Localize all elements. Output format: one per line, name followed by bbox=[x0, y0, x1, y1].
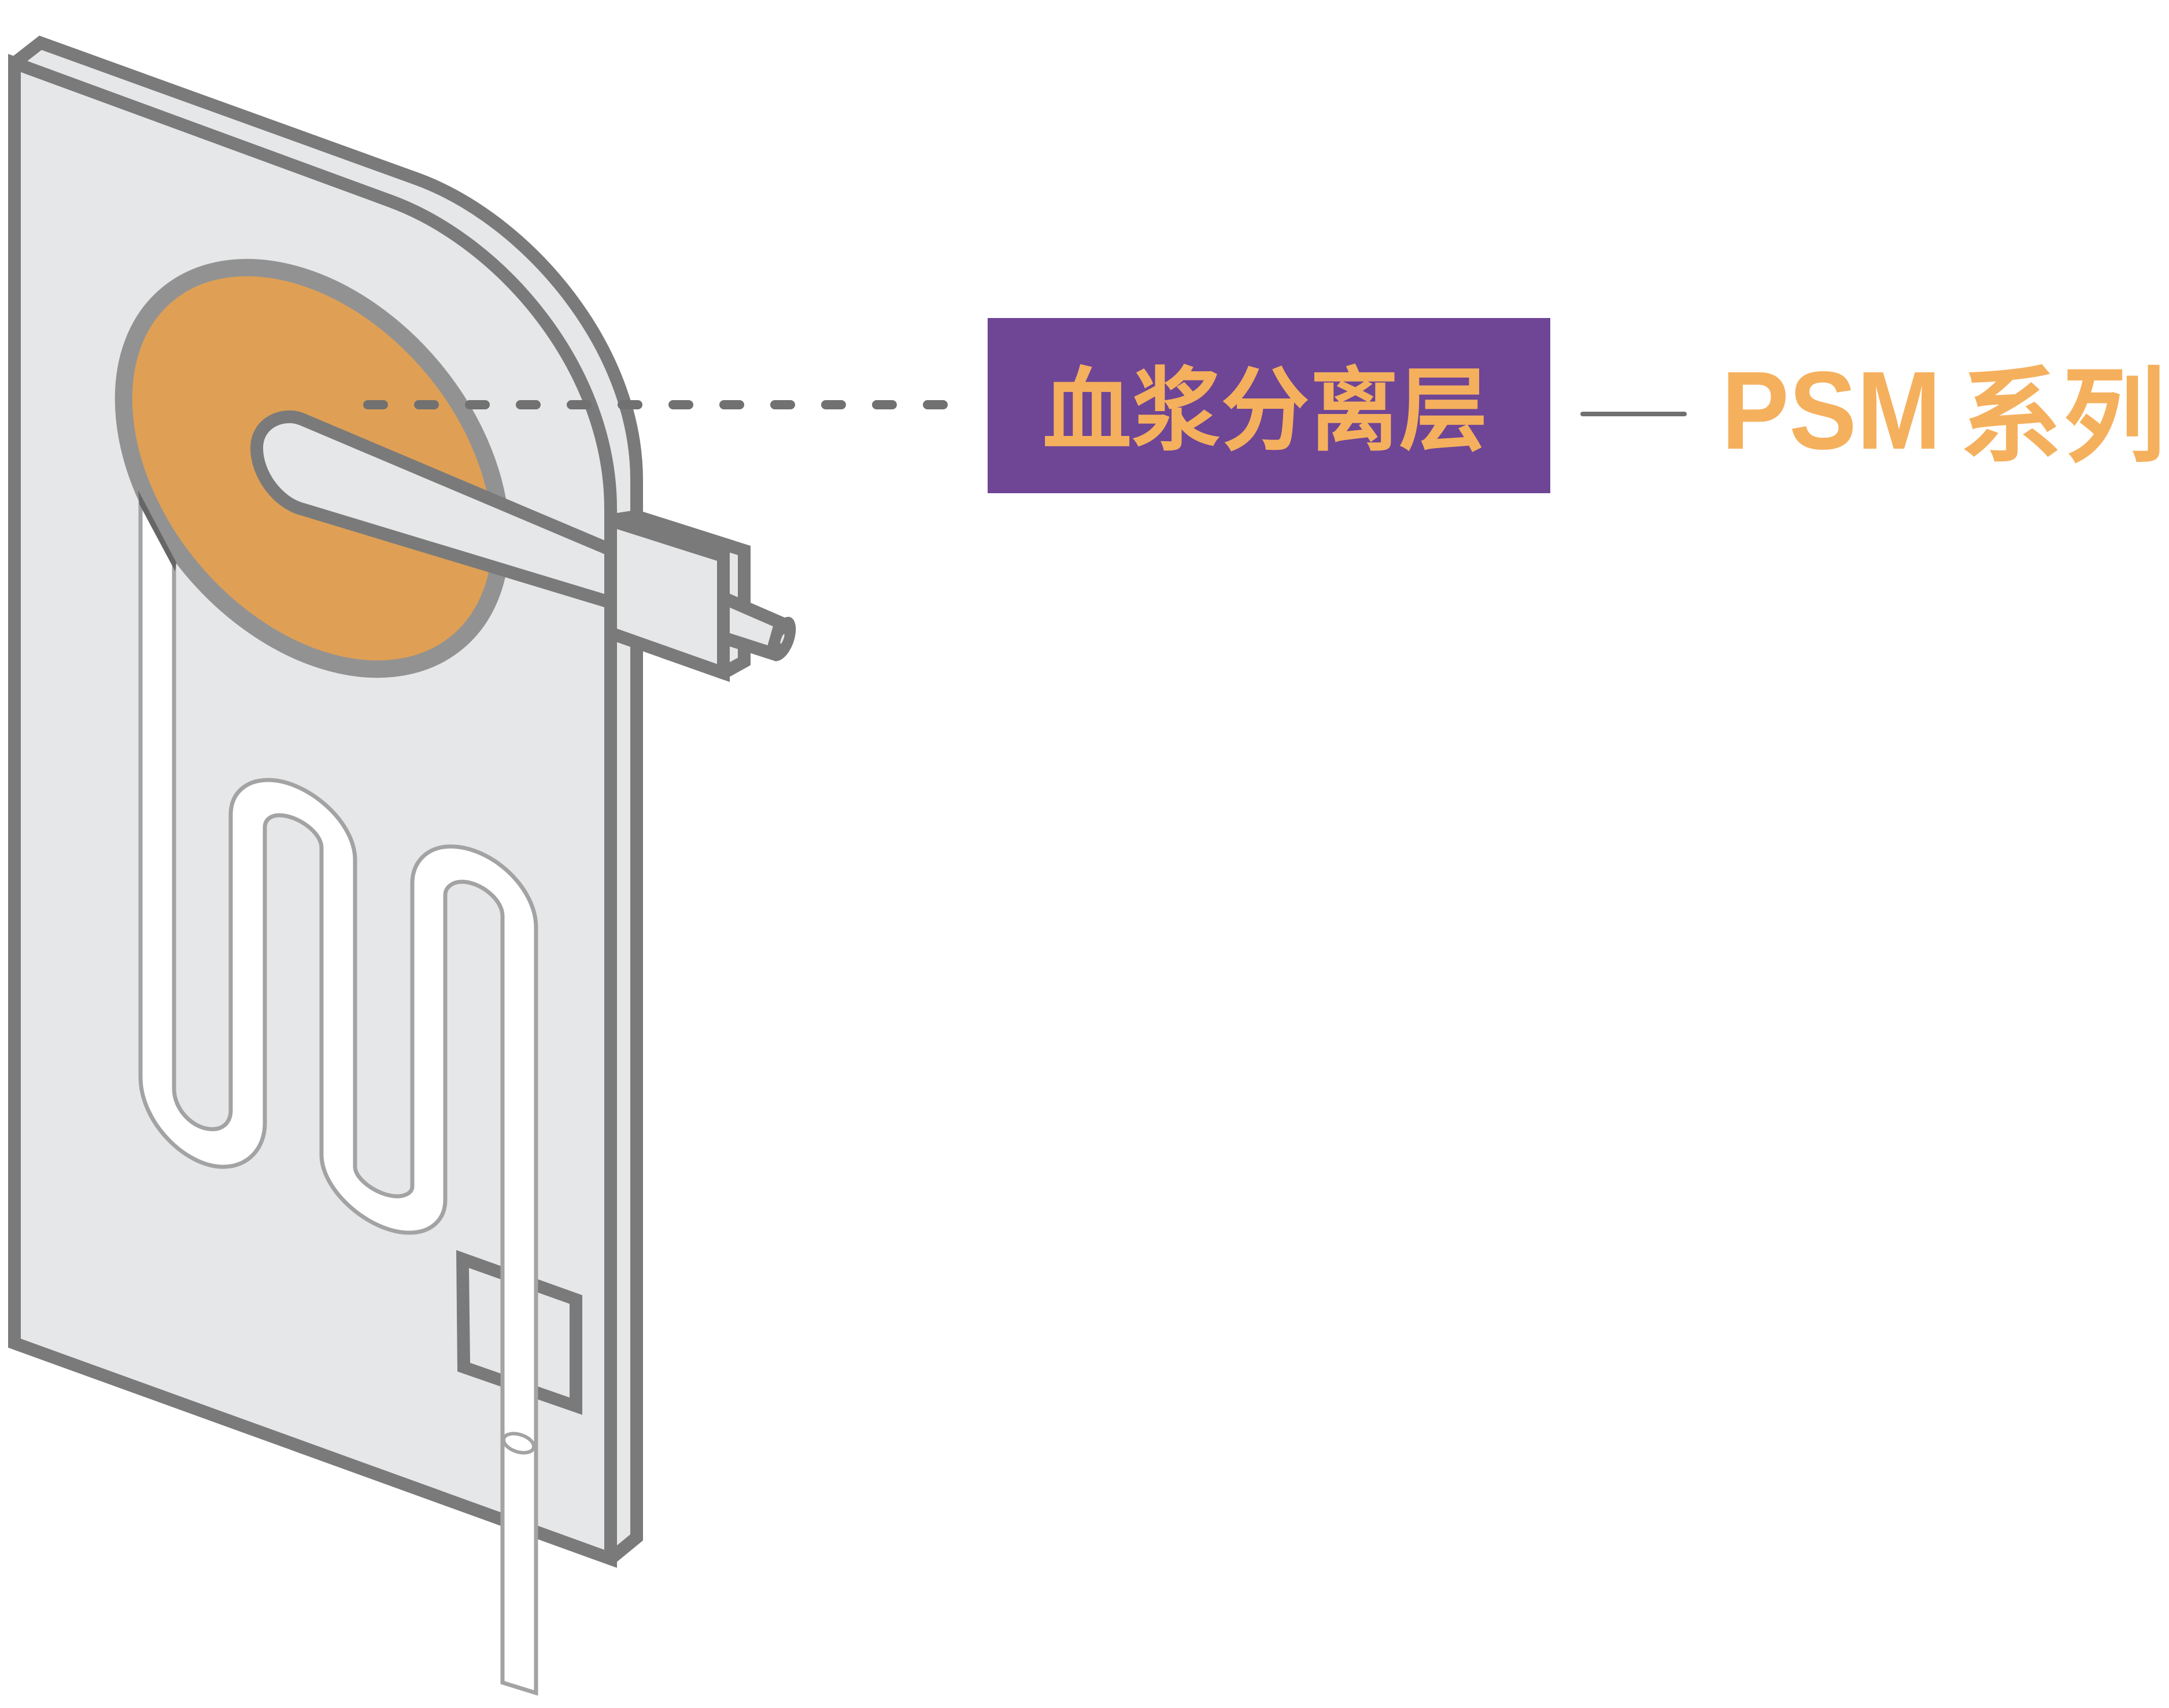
series name: 系列 bbox=[1960, 359, 2166, 475]
orange plasma separation membrane bbox=[47, 194, 578, 743]
series name: PSM bbox=[1721, 348, 1941, 472]
front plate right edge over slot bbox=[604, 509, 617, 642]
outlet nozzle bbox=[723, 598, 801, 664]
connector line bbox=[1583, 412, 1684, 416]
series name bbox=[1721, 348, 2166, 475]
connector rear box bbox=[611, 516, 744, 673]
back plate bbox=[14, 43, 637, 1559]
handle slot bbox=[257, 417, 611, 602]
front plate bbox=[14, 63, 611, 1559]
dark sliver at membrane edge bbox=[138, 490, 176, 571]
serpentine white tube bbox=[141, 486, 536, 1693]
tube opening ellipse bbox=[501, 1430, 536, 1456]
dashed leader line bbox=[368, 400, 948, 409]
connector front face bbox=[611, 520, 723, 673]
purple label box bbox=[988, 318, 1550, 493]
device illustration bbox=[14, 43, 801, 1693]
label text: 血浆分离层 bbox=[1043, 360, 1488, 462]
connector front face opening over plate edge bbox=[617, 530, 717, 663]
rectangular window bbox=[456, 1250, 582, 1415]
